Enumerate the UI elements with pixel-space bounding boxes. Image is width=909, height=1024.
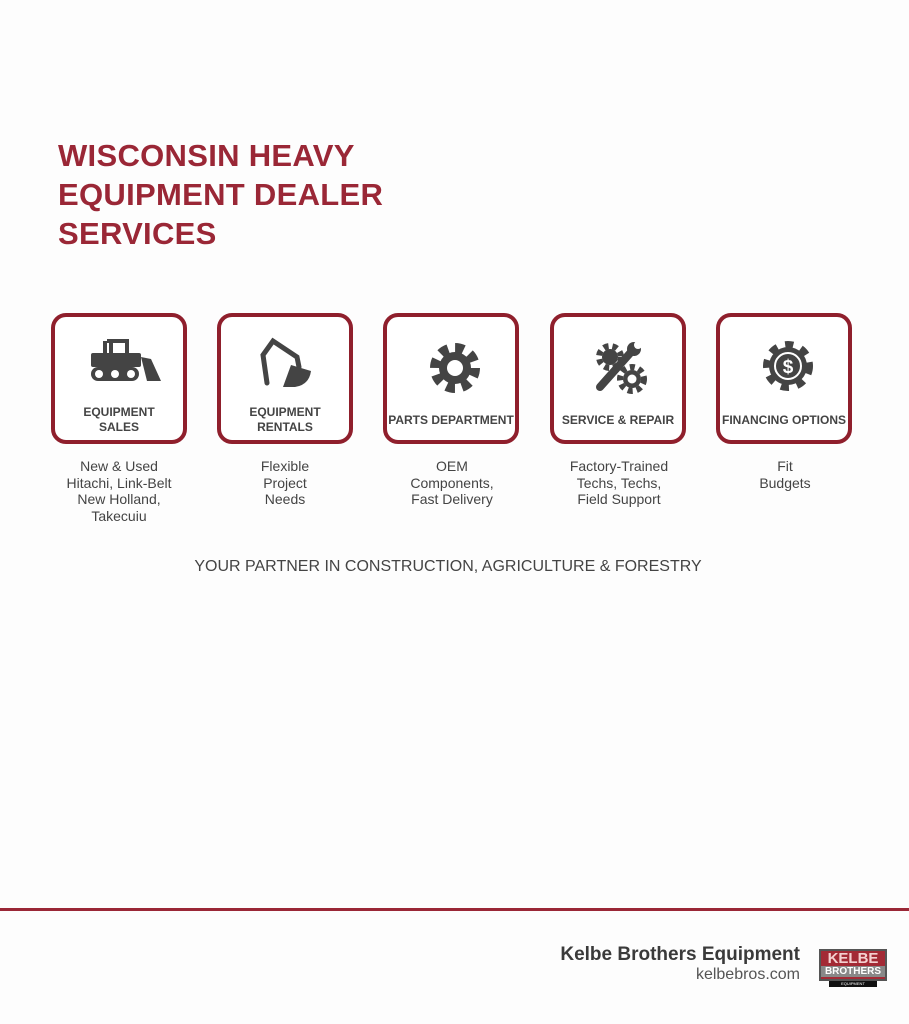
text: parts description: OEM xyxy=(436,458,468,474)
text: financing description: Budgets xyxy=(759,474,811,490)
text: sales description xyxy=(66,458,172,524)
icon: dollar gear xyxy=(763,341,813,391)
title: WISCONSIN HEAVY xyxy=(58,138,355,173)
panel: equipment sales: SALES xyxy=(99,420,139,434)
panel: parts department: PARTS DEPARTMENT xyxy=(388,413,514,427)
text: parts description xyxy=(410,458,494,507)
text: rentals description: Flexible xyxy=(261,458,309,474)
icon: wrench and gears xyxy=(596,342,647,394)
text: service description: Factory-Trained xyxy=(570,458,668,474)
text: service description: Techs, Techs, xyxy=(577,474,661,490)
panel: equipment sales: EQUIPMENT xyxy=(83,405,155,419)
title: EQUIPMENT DEALER xyxy=(58,177,383,212)
panel: equipment rentals: RENTALS xyxy=(257,420,313,434)
panel: service & repair: SERVICE & REPAIR xyxy=(562,413,674,427)
panel: service & repair xyxy=(550,313,686,444)
text: sales description: Hitachi, Link-Belt xyxy=(66,474,172,490)
icon: dollar gear: $ xyxy=(783,357,794,378)
panel: equipment sales xyxy=(51,313,187,444)
title: SERVICES xyxy=(58,216,217,251)
text: financing description: Fit xyxy=(777,458,793,474)
icon: gear xyxy=(430,343,480,393)
text: rentals description xyxy=(261,458,309,507)
panel: equipment rentals: EQUIPMENT xyxy=(249,405,321,419)
text: rentals description: Project xyxy=(263,474,307,490)
footer: company name xyxy=(560,944,800,983)
panel: financing options xyxy=(716,313,852,444)
text: parts description: Fast Delivery xyxy=(411,491,493,507)
logo xyxy=(819,949,887,987)
logo: EQUIPMENT xyxy=(841,981,865,986)
text: sales description: Takecuiu xyxy=(91,508,147,524)
panel: equipment rentals xyxy=(217,313,353,444)
logo: KELBE xyxy=(828,950,878,967)
logo: BROTHERS xyxy=(825,966,881,977)
footer divider xyxy=(0,908,909,911)
text: parts description: Components, xyxy=(410,474,494,490)
text: rentals description: Needs xyxy=(265,491,305,507)
text: service description xyxy=(570,458,668,507)
text: sales description: New & Used xyxy=(80,458,158,474)
panel: financing options: FINANCING OPTIONS xyxy=(722,413,846,427)
footer: company name: Kelbe Brothers Equipment xyxy=(560,944,800,965)
tagline: YOUR PARTNER IN CONSTRUCTION, AGRICULTURE & FORESTRY xyxy=(194,558,702,575)
panel: parts department xyxy=(383,313,519,444)
title xyxy=(58,138,383,251)
text: financing description xyxy=(759,458,811,491)
footer: company name: kelbebros.com xyxy=(696,966,800,983)
text: service description: Field Support xyxy=(577,491,661,507)
icon: bulldozer xyxy=(91,339,161,381)
text: sales description: New Holland, xyxy=(77,491,161,507)
icon: excavator arm xyxy=(260,338,311,387)
